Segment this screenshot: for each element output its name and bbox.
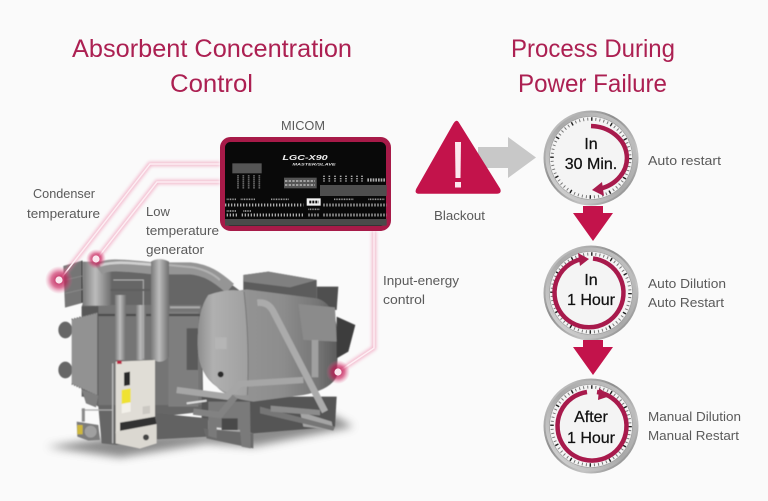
clock: in 1 hour: 1 Hour bbox=[567, 292, 616, 309]
label: auto restart: Auto restart bbox=[648, 153, 721, 168]
label: micom: MICOM bbox=[281, 118, 325, 133]
label: input-energy control bbox=[383, 273, 460, 307]
connector lines: micom to sensors bbox=[59, 164, 374, 372]
label: low temperature generator: Low bbox=[146, 204, 170, 219]
sensor point: low temperature generator bbox=[86, 249, 106, 269]
label: manual dilution manual restart: Manual Restart bbox=[648, 428, 739, 443]
label: low temperature generator bbox=[146, 204, 219, 257]
label: manual dilution manual restart: Manual Dilution bbox=[648, 409, 741, 424]
arrow: stage two to three bbox=[573, 340, 613, 375]
label: condenser temperature: Condenser bbox=[33, 186, 96, 201]
label: auto dilution auto restart bbox=[648, 276, 726, 310]
clock: in 30 min: In bbox=[584, 136, 598, 153]
label: condenser temperature: temperature bbox=[27, 206, 100, 221]
clock: after 1 hour: After bbox=[574, 409, 609, 426]
title: absorbent concentration control: Control bbox=[170, 70, 253, 98]
label: manual dilution manual restart bbox=[648, 409, 741, 443]
sensor point: condenser temperature bbox=[45, 266, 73, 294]
label: low temperature generator: temperature bbox=[146, 223, 219, 238]
sensor point: input-energy control bbox=[326, 360, 350, 384]
micom controller panel: LGC-X90 bbox=[282, 155, 328, 162]
clock: after 1 hour: 1 Hour bbox=[567, 430, 616, 447]
title: process during power failure: Process During bbox=[511, 35, 675, 63]
clock: in 1 hour: In bbox=[584, 272, 598, 289]
absorption chiller machine bbox=[47, 259, 355, 457]
icon: blackout warning triangle bbox=[416, 122, 500, 193]
micom controller panel bbox=[222, 140, 388, 228]
label: auto dilution auto restart: Auto Dilution bbox=[648, 276, 726, 291]
label: input-energy control: control bbox=[383, 292, 425, 307]
clock: in 30 min: 30 Min. bbox=[565, 156, 617, 173]
title: process during power failure: Power Failure bbox=[518, 70, 667, 98]
title: absorbent concentration control: Absorbent Concentration bbox=[72, 35, 352, 63]
micom controller panel: MASTER/SLAVE bbox=[292, 163, 337, 167]
label: low temperature generator: generator bbox=[146, 242, 205, 257]
arrow: blackout to first stage bbox=[478, 137, 536, 178]
label: auto dilution auto restart: Auto Restart bbox=[648, 295, 724, 310]
clock: after 1 hour bbox=[544, 378, 638, 474]
title: process during power failure bbox=[511, 35, 675, 98]
clock: in 30 min bbox=[544, 110, 638, 206]
label: blackout: Blackout bbox=[434, 208, 485, 223]
clock: in 1 hour bbox=[544, 246, 638, 340]
title: absorbent concentration control bbox=[72, 35, 352, 98]
arrow: stage one to two bbox=[573, 206, 613, 241]
label: input-energy control: Input-energy bbox=[383, 273, 460, 288]
label: condenser temperature bbox=[27, 186, 100, 221]
